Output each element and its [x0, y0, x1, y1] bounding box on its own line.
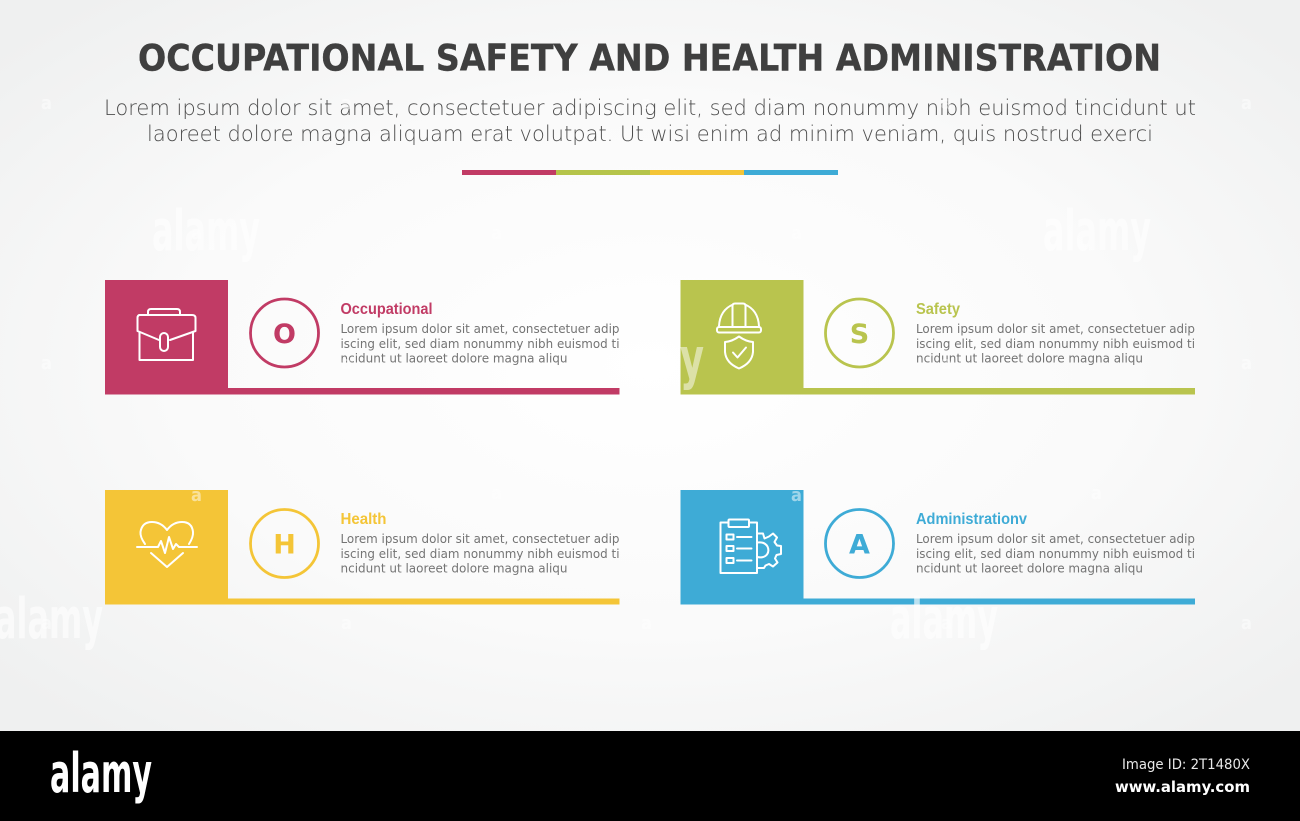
description text: ncidunt ut laoreet dolore magna aliqu — [916, 350, 1143, 366]
description text — [340, 321, 620, 366]
subtitle text block: laoreet dolore magna aliquam erat volutpat. Ut wisi enim ad minim veniam, quis nostrud exerci — [147, 122, 1153, 147]
colour block and underline — [105, 490, 620, 604]
stock watermarks: a — [191, 485, 202, 506]
stock watermarks: a — [41, 93, 52, 114]
stock watermarks: a — [641, 93, 652, 114]
stock watermarks: a — [341, 93, 352, 114]
letter circle H: H — [273, 530, 296, 560]
letter circle A — [826, 510, 894, 578]
footer logo: alamy — [50, 742, 152, 805]
stock watermarks: alamy — [152, 199, 260, 264]
heading: Occupational: Occupational — [340, 301, 432, 318]
stock watermarks: a — [1241, 613, 1252, 634]
subtitle text block: Lorem ipsum dolor sit amet, consectetuer adipiscing elit, sed diam nonummy nibh euismod tincidunt ut — [104, 96, 1196, 121]
stock watermarks: a — [791, 223, 802, 244]
colour block and underline — [105, 280, 620, 394]
image id: Image ID: 2T1480X — [1122, 757, 1250, 773]
stock watermarks: a — [641, 613, 652, 634]
letter circle S: S — [850, 319, 869, 350]
description text: ncidunt ut laoreet dolore magna aliqu — [340, 350, 568, 366]
letter circle O: O — [273, 319, 296, 350]
description text: Lorem ipsum dolor sit amet, consectetuer adip — [340, 531, 620, 546]
stock watermarks: a — [641, 353, 652, 374]
heading: Health: Health — [340, 511, 386, 528]
title: OCCUPATIONAL SAFETY AND HEALTH ADMINISTRATION — [138, 36, 1161, 80]
stock watermarks: a — [191, 223, 202, 244]
stock watermarks: y — [680, 327, 704, 392]
stock watermarks: a — [341, 353, 352, 374]
panel: Safety — [680, 280, 1195, 394]
stock watermarks: a — [941, 93, 952, 114]
stock watermarks: alamy — [890, 587, 998, 652]
subtitle text block — [104, 96, 1196, 147]
stock watermarks: alamy — [0, 587, 103, 652]
stock watermarks: a — [491, 483, 502, 504]
letter circle O — [250, 299, 318, 367]
letter circle A: A — [849, 530, 870, 560]
stock watermarks: a — [341, 613, 352, 634]
description text: ncidunt ut laoreet dolore magna aliqu — [340, 560, 568, 576]
colour block and underline — [680, 280, 1195, 394]
panel: Health — [105, 490, 620, 604]
panel: Occupational — [105, 280, 620, 394]
stock watermarks: a — [941, 353, 952, 374]
stock watermarks: a — [1241, 93, 1252, 114]
letter circle S — [826, 299, 894, 367]
website: www.alamy.com — [1115, 778, 1250, 796]
panel: Administration — [680, 490, 1195, 604]
description text: Lorem ipsum dolor sit amet, consectetuer adip — [340, 321, 620, 336]
description text: iscing elit, sed diam nonummy nibh euismod ti — [340, 336, 620, 351]
description text: Lorem ipsum dolor sit amet, consectetuer adip — [916, 531, 1195, 546]
description text — [916, 321, 1195, 366]
stock watermarks: a — [1241, 353, 1252, 374]
description text: iscing elit, sed diam nonummy nibh euismod ti — [340, 546, 620, 561]
icon: heart with pulse — [137, 522, 197, 567]
letter circle H — [250, 510, 318, 578]
stock watermarks: a — [791, 485, 802, 506]
description text: ncidunt ut laoreet dolore magna aliqu — [916, 560, 1143, 576]
heading: Safety: Safety — [916, 301, 960, 318]
footer bar — [0, 731, 1300, 821]
icon: clipboard and gear — [720, 520, 781, 573]
icon: helmet and shield — [717, 304, 761, 368]
stock watermarks: a — [491, 223, 502, 244]
description text — [916, 531, 1195, 576]
four colour title rule — [462, 170, 838, 175]
heading: Administrationv: Administrationv — [916, 511, 1027, 528]
stock watermarks: a — [1091, 483, 1102, 504]
description text: Lorem ipsum dolor sit amet, consectetuer adip — [916, 321, 1195, 336]
stock watermarks: alamy — [1043, 199, 1151, 264]
description text: iscing elit, sed diam nonummy nibh euismod ti — [916, 546, 1195, 561]
colour block and underline — [680, 490, 1195, 604]
description text — [340, 531, 620, 576]
stock watermarks: a — [41, 353, 52, 374]
description text: iscing elit, sed diam nonummy nibh euismod ti — [916, 336, 1195, 351]
stock watermarks: a — [941, 613, 952, 634]
stock watermarks — [0, 93, 1252, 652]
stock watermarks: a — [41, 613, 52, 634]
icon: briefcase — [138, 309, 196, 360]
